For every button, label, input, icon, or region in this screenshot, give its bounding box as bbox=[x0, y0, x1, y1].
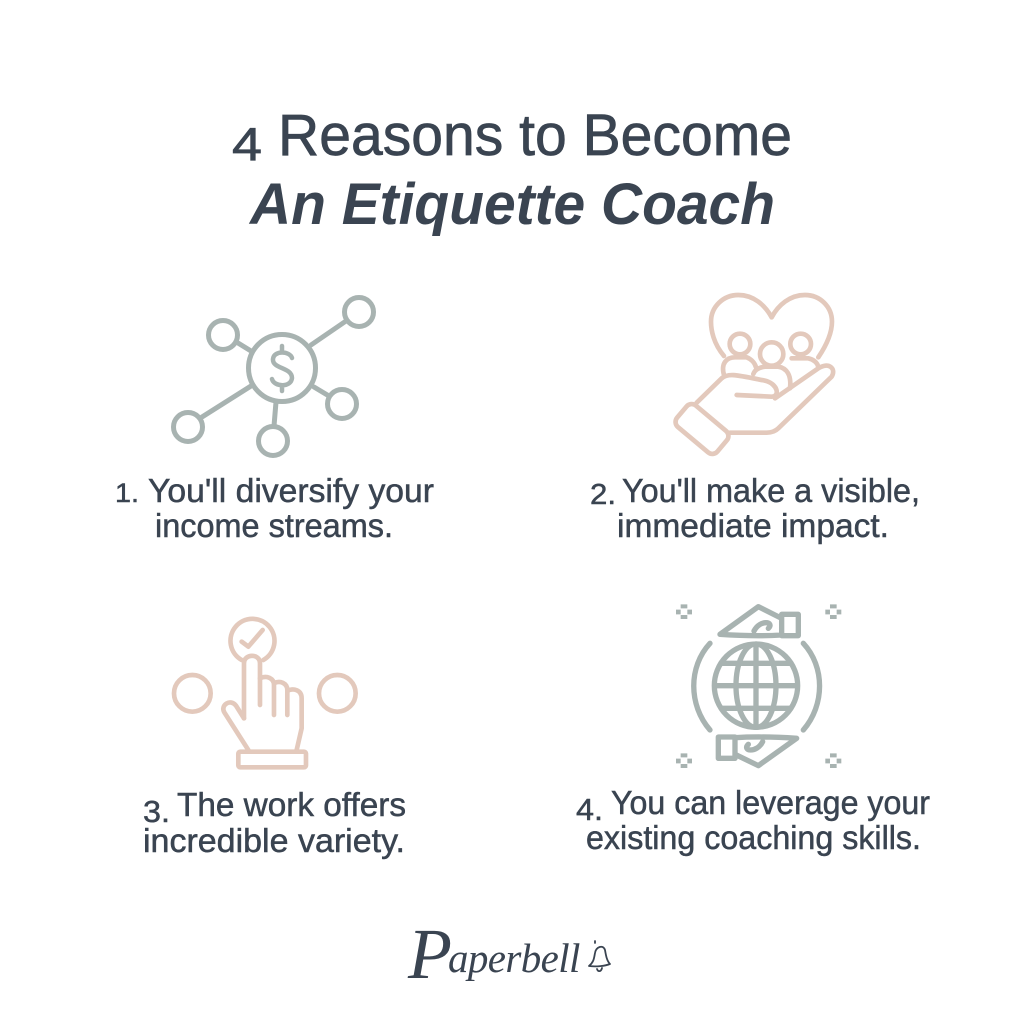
icon: bell bbox=[589, 941, 610, 971]
item 3 text: The work offers bbox=[177, 786, 406, 823]
icon: hands around globe bbox=[676, 604, 841, 768]
title: 4 bbox=[232, 118, 262, 170]
item 3 text: incredible variety. bbox=[143, 822, 405, 859]
item 1 text: You'll diversify your bbox=[148, 472, 434, 509]
title: An Etiquette Coach bbox=[248, 172, 775, 237]
logo: Paperbell: P bbox=[407, 914, 452, 994]
item 3 text: 3. bbox=[143, 794, 170, 829]
item 2 text: You'll make a visible, bbox=[622, 472, 920, 509]
icon: pointing hand selecting option bbox=[174, 619, 356, 767]
item 1 text: 1. bbox=[115, 478, 139, 508]
item 2 text bbox=[590, 472, 920, 544]
title: Reasons to Become bbox=[278, 103, 792, 168]
item 4 text: 4. bbox=[576, 792, 603, 827]
logo: Paperbell: aperbell bbox=[448, 935, 580, 981]
item 3 text bbox=[143, 786, 406, 859]
item 2 text: 2. bbox=[590, 479, 616, 511]
item 4 text bbox=[576, 784, 930, 856]
logo: Paperbell bbox=[407, 914, 610, 994]
item 4 text: existing coaching skills. bbox=[586, 819, 921, 856]
item 1 text: income streams. bbox=[155, 507, 393, 544]
item 4 text: You can leverage your bbox=[611, 784, 930, 821]
item 2 text: immediate impact. bbox=[617, 507, 889, 544]
icon: hand holding heart with people bbox=[673, 295, 833, 457]
item 1 text bbox=[115, 472, 434, 544]
title bbox=[232, 103, 792, 237]
icon: income network with dollar sign bbox=[174, 298, 374, 456]
